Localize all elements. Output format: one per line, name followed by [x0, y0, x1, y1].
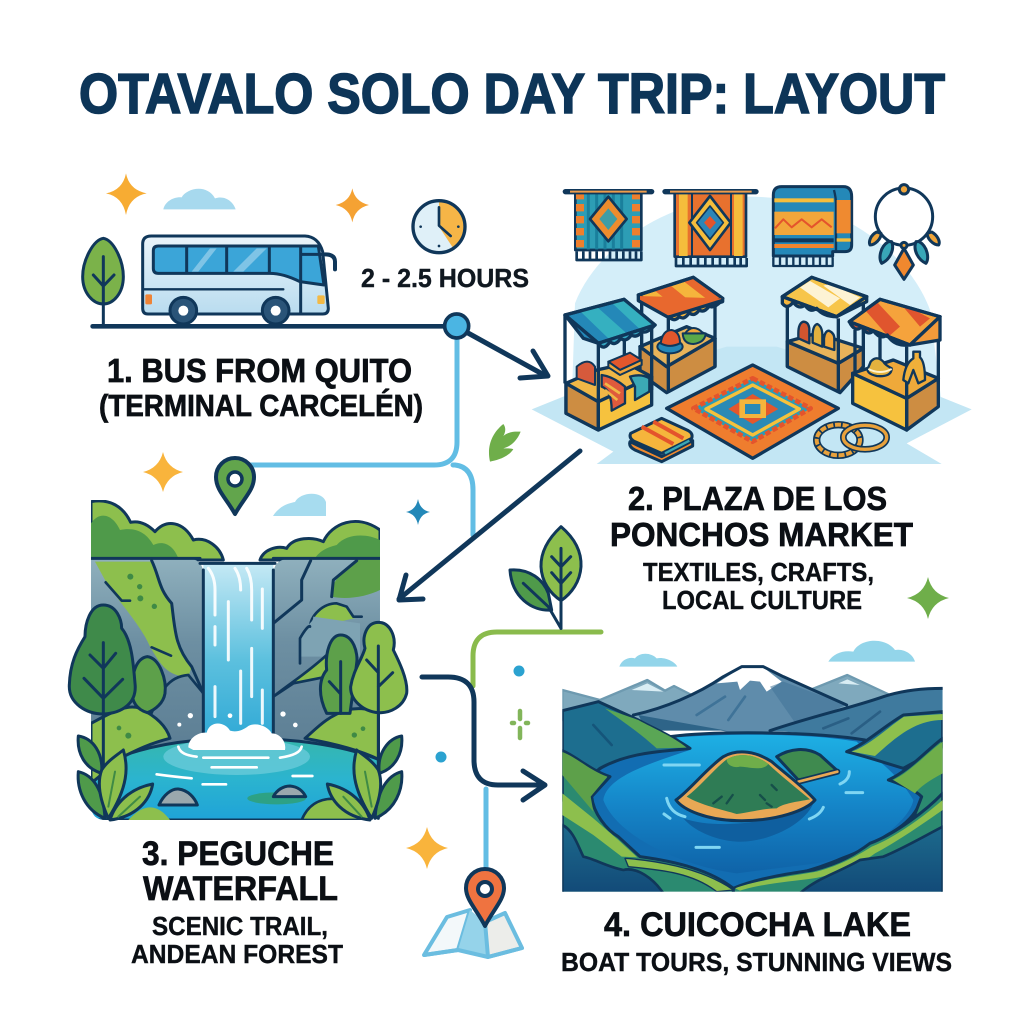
icon: cloud — [273, 494, 326, 516]
falling water — [200, 563, 275, 740]
heading: step 3: WATERFALL — [143, 870, 338, 908]
decorative dots — [436, 666, 528, 762]
label: duration: 2 - 2.5 HOURS — [361, 263, 529, 293]
text: step 4 description: BOAT TOURS, STUNNING VIEWS — [561, 947, 952, 977]
icon: star small — [336, 188, 369, 222]
necklace — [869, 185, 939, 279]
icon: clock — [413, 201, 465, 253]
icon: plant — [510, 527, 581, 628]
heading: step 1: 1. BUS FROM QUITO — [107, 352, 412, 389]
pool — [91, 724, 380, 820]
stall: back right — [782, 277, 867, 393]
heading: step 2 — [610, 480, 913, 553]
text: step 2 description: TEXTILES, CRAFTS, — [643, 557, 874, 587]
leaves: right — [327, 736, 402, 820]
icon: blue sparkle — [406, 499, 430, 525]
textile: folded blanket — [773, 187, 852, 266]
text: step 3 description: SCENIC TRAIL, — [152, 911, 328, 941]
icon: bus — [143, 236, 335, 324]
volcano — [633, 667, 847, 732]
text: step 2 description — [643, 557, 874, 615]
text: step 3 description — [131, 911, 343, 969]
icon: map with pin — [424, 869, 522, 957]
tree: left large — [69, 605, 135, 818]
panel: bus section — [83, 173, 469, 338]
clouds — [619, 641, 915, 667]
shore: upper left headland — [562, 702, 690, 800]
shore: lower right — [733, 793, 943, 893]
arrow: bus to market — [468, 333, 548, 378]
rug — [667, 365, 838, 458]
panel: waterfall illustration — [69, 501, 407, 820]
arrow: market to waterfall — [399, 451, 580, 600]
icon: orange star — [143, 452, 183, 492]
route node — [445, 314, 469, 338]
island — [676, 750, 838, 821]
icon: green location pin — [216, 458, 254, 514]
icon: orange star — [406, 827, 448, 869]
shore: upper right headland — [847, 712, 943, 768]
text: step 3 description: ANDEAN FOREST — [131, 939, 343, 969]
stall: back left — [638, 277, 723, 393]
heading: step 2: PONCHOS MARKET — [610, 516, 913, 553]
spray dots — [177, 711, 298, 727]
heading: step 1: (TERMINAL CARCELÉN) — [99, 388, 423, 423]
cliffs — [91, 558, 380, 767]
shore: lower left — [562, 751, 733, 893]
route lines — [250, 338, 601, 868]
icon: cloud — [163, 189, 236, 209]
bracelets — [817, 425, 887, 455]
tree: left small — [132, 657, 165, 713]
market background — [532, 197, 972, 464]
tree: right pair — [320, 622, 407, 818]
leaves: left — [78, 736, 153, 820]
panel: market illustration — [532, 185, 972, 464]
stall: front right — [849, 299, 940, 430]
panel: lake illustration — [562, 641, 943, 893]
far ridges — [770, 688, 943, 750]
lake water — [589, 733, 922, 888]
heading: step 4: 4. CUICOCHA LAKE — [604, 906, 911, 944]
heading: step 2: 2. PLAZA DE LOS — [628, 480, 887, 517]
ground bushes — [91, 707, 380, 783]
back mountains — [562, 675, 890, 720]
bushes — [91, 501, 380, 560]
road line — [93, 319, 445, 333]
heading: step 1 — [99, 352, 423, 423]
folded cloth — [630, 418, 693, 462]
shore: right headland — [888, 738, 943, 818]
icon: star — [106, 173, 147, 215]
text: step 2 description: LOCAL CULTURE — [662, 585, 862, 615]
stall: front left — [565, 299, 655, 430]
textile: orange tapestry — [665, 191, 756, 266]
heading: step 3: 3. PEGUCHE — [142, 835, 334, 873]
icon: tree — [83, 238, 123, 325]
heading: step 3 — [142, 835, 338, 908]
icon: green star — [907, 577, 949, 619]
textile: teal tapestry — [565, 191, 652, 260]
icon: leaf sprig — [489, 424, 521, 462]
arrow: waterfall to lake — [422, 677, 545, 800]
